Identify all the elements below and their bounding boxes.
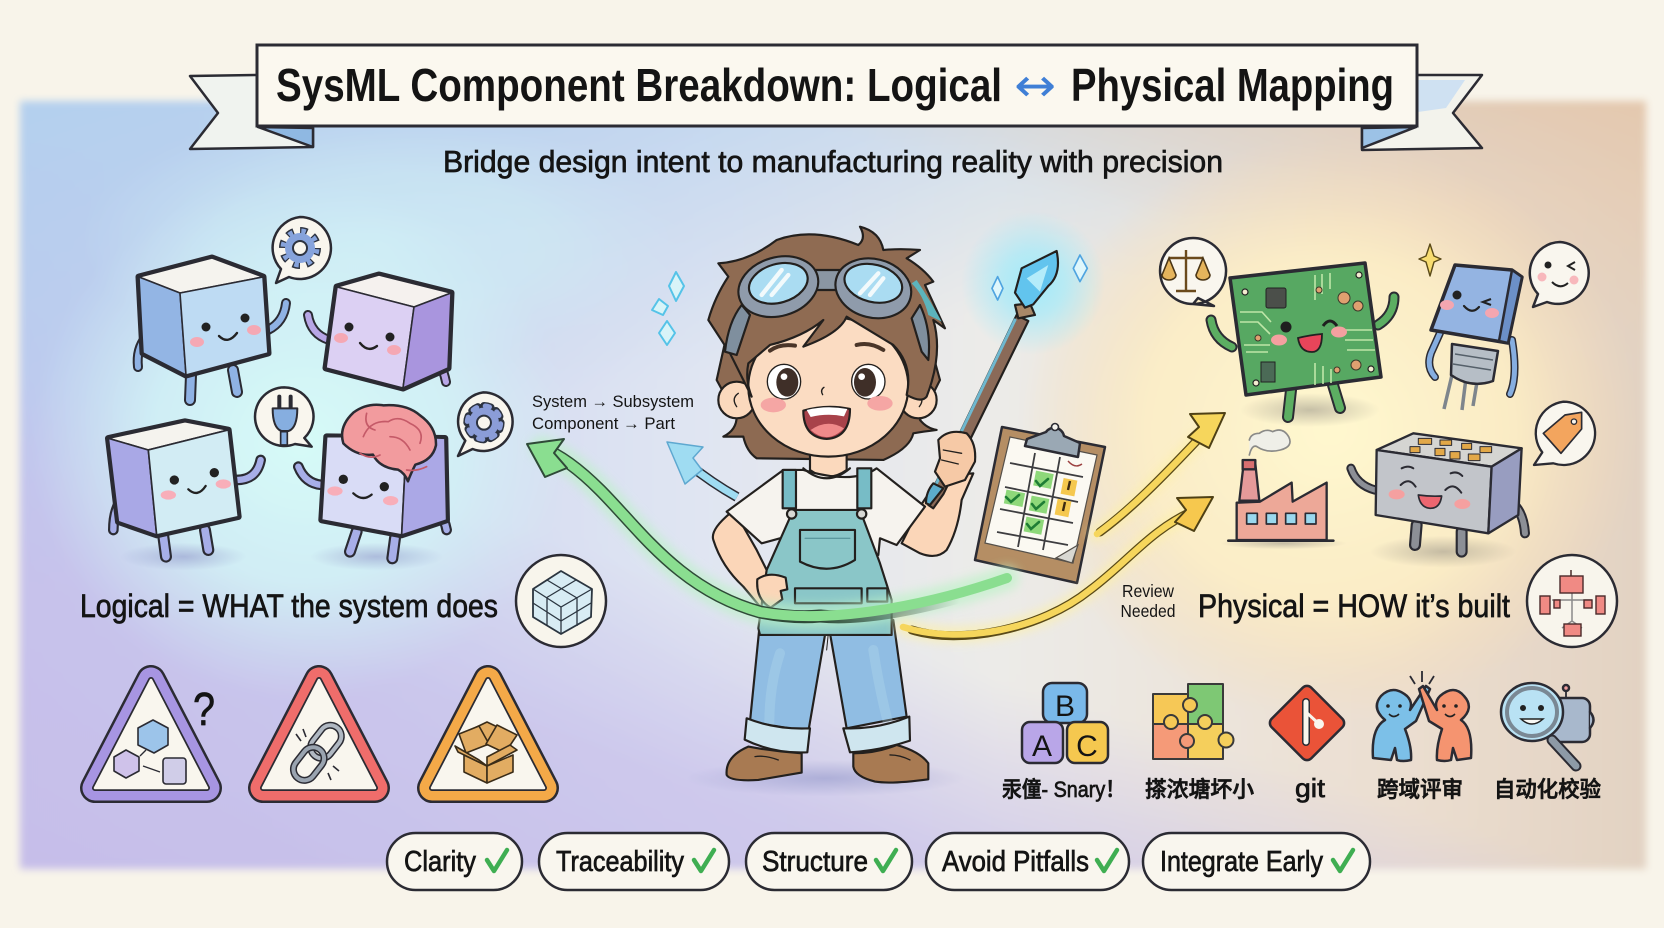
icon: puzzle xyxy=(1153,684,1234,759)
hierarchy note: System → Subsystem xyxy=(532,392,694,411)
icon captions xyxy=(1002,773,1601,803)
page curl xyxy=(1056,545,1078,563)
back hair xyxy=(717,287,940,460)
triangle: open box xyxy=(432,680,544,788)
block characters with plug and brain xyxy=(108,387,513,571)
title banner xyxy=(190,45,1482,150)
right arm xyxy=(902,473,973,556)
checklist status cells xyxy=(1004,461,1082,535)
cuffs xyxy=(745,717,910,752)
blue chip character xyxy=(1429,265,1522,410)
takeaway pills xyxy=(387,833,1370,890)
icon: git diamond xyxy=(1267,683,1347,763)
icon: ABC blocks: A xyxy=(1032,730,1052,763)
factory, battery chip and tag xyxy=(1220,402,1595,568)
hand on staff xyxy=(935,432,975,487)
arrow: green logical xyxy=(527,439,1007,617)
overalls bib xyxy=(758,468,892,635)
bubble: scales xyxy=(1160,238,1226,306)
logical side characters xyxy=(108,217,513,571)
brain xyxy=(342,405,436,481)
pill: integrate early xyxy=(1143,833,1370,890)
left ribbon tail xyxy=(190,75,313,149)
goggles xyxy=(725,247,929,360)
bubble: wink face xyxy=(1530,242,1589,307)
hierarchy note xyxy=(532,392,694,433)
review note: Needed xyxy=(1120,601,1176,621)
right ribbon tail xyxy=(1362,75,1482,150)
teal hair streak xyxy=(912,280,942,322)
bubble: plug xyxy=(255,387,314,447)
PCB character xyxy=(1211,263,1394,427)
block character: blue xyxy=(138,258,286,400)
central character xyxy=(685,227,1087,797)
mouth xyxy=(803,407,850,439)
arrow: yellow upper xyxy=(1097,413,1225,534)
bubble: gear lower xyxy=(458,392,513,456)
pill: avoid pitfalls: Avoid Pitfalls xyxy=(942,846,1089,878)
connector pins xyxy=(1410,438,1492,461)
sparkle xyxy=(1419,244,1441,276)
triangle: broken chain xyxy=(263,680,375,788)
pitfall warning triangles xyxy=(95,680,544,788)
banner body xyxy=(257,45,1417,126)
circuit traces xyxy=(1240,273,1375,385)
icon: ABC blocks xyxy=(1022,683,1108,763)
review note: Review xyxy=(1122,581,1174,601)
icon: wireframe cube xyxy=(516,555,606,647)
icon captions: 跨域评审 xyxy=(1377,777,1463,802)
icon: magnifier robot xyxy=(1501,683,1594,766)
pill: structure: Structure xyxy=(762,846,868,878)
pill: avoid pitfalls xyxy=(926,833,1129,890)
triangle: ambiguous structure xyxy=(95,680,215,788)
wand glow xyxy=(961,211,1105,355)
pill: clarity xyxy=(387,833,522,890)
pill: traceability xyxy=(539,833,729,890)
subtitle: Bridge design intent to manufacturing reality with precision xyxy=(443,144,1223,179)
neck xyxy=(810,453,847,477)
icon: ABC blocks: B xyxy=(1055,690,1075,723)
icon captions: 汞僮- Snary！ xyxy=(1002,777,1125,802)
crystal sparkles xyxy=(992,255,1087,300)
best practice icons xyxy=(1002,671,1601,803)
bidirectional arrow: ↔ xyxy=(1014,58,1056,112)
block character: lavender left xyxy=(108,422,261,557)
clipboard xyxy=(975,424,1105,583)
pill: traceability: Traceability xyxy=(556,846,684,878)
ground shadow xyxy=(685,760,965,797)
icon: high five xyxy=(1373,671,1471,761)
logical definition: Logical = WHAT the system does xyxy=(80,588,498,624)
arrow: yellow lower xyxy=(903,497,1213,636)
icon: ABC blocks: C xyxy=(1076,730,1098,763)
face and ears xyxy=(718,317,937,457)
arrow: blue xyxy=(667,442,737,497)
bubble: gear top xyxy=(273,217,331,283)
checklist grid xyxy=(997,453,1083,550)
icon: block diagram xyxy=(1527,555,1617,647)
hand on hip xyxy=(757,575,787,608)
icon captions: 搽浓塘坏小 xyxy=(1145,777,1254,802)
review note xyxy=(1120,581,1176,621)
crystal xyxy=(1015,251,1058,308)
boots xyxy=(727,745,928,783)
bubble: price tag xyxy=(1534,402,1595,465)
hierarchy note: Component → Part xyxy=(532,414,675,433)
title text: SysML Component Breakdown: Logical xyxy=(276,59,1002,111)
pill: integrate early: Integrate Early xyxy=(1160,846,1323,878)
block character: lavender xyxy=(308,275,451,388)
grey component character xyxy=(1351,433,1525,552)
title text: Physical Mapping xyxy=(1071,59,1394,111)
factory icon xyxy=(1228,430,1333,541)
top hair xyxy=(708,227,945,400)
cheeks xyxy=(761,398,786,412)
icon captions: git xyxy=(1295,773,1326,803)
brows xyxy=(770,344,883,351)
staff xyxy=(926,303,1035,508)
physical side characters xyxy=(1160,238,1595,568)
legs xyxy=(750,620,907,743)
sparkles left of the character xyxy=(652,272,684,345)
pill: clarity: Clarity xyxy=(404,846,476,878)
physical definition: Physical = HOW it’s built xyxy=(1198,588,1510,624)
left arm xyxy=(713,513,785,607)
pill: structure xyxy=(746,833,912,890)
triangle: ambiguous structure: ? xyxy=(193,683,215,735)
icon captions: 自动化校验 xyxy=(1494,777,1601,802)
eyes xyxy=(767,364,885,399)
components xyxy=(1266,288,1286,308)
block character: brain xyxy=(298,405,447,558)
shirt xyxy=(727,468,925,555)
nose xyxy=(822,387,824,395)
clip xyxy=(1025,428,1080,457)
